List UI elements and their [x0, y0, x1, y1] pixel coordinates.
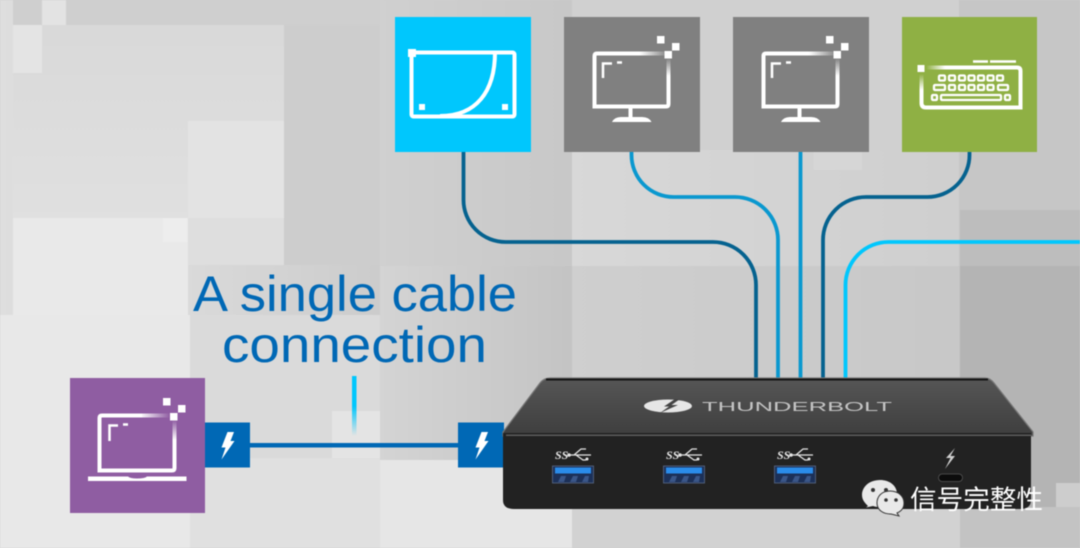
callout leader line [352, 376, 356, 436]
dock logo: THUNDERBOLT [702, 399, 892, 414]
usb port 1: SS [555, 448, 569, 462]
heading: A single cable [193, 266, 517, 322]
cable: keyboard [823, 152, 970, 378]
thunderbolt port [938, 448, 962, 482]
watermark [862, 480, 1043, 516]
tile: tablet [395, 17, 531, 152]
heading [193, 266, 517, 373]
cable: monitor 2 [799, 152, 802, 378]
tile: laptop [70, 378, 205, 513]
tile: monitor 1 [564, 17, 700, 152]
tile: keyboard [902, 17, 1037, 152]
single cable link [205, 422, 504, 468]
dock logo [644, 399, 892, 414]
usb port 3: SS [777, 448, 791, 462]
port: left thunderbolt [205, 422, 250, 468]
heading: connection [222, 317, 487, 373]
usb port 3 [774, 448, 816, 483]
usb port 2: SS [666, 448, 680, 462]
port: right thunderbolt [458, 422, 504, 468]
cables from hub to devices [464, 152, 1080, 378]
icon: wechat bubbles [862, 480, 904, 516]
usb port 2 [664, 448, 704, 483]
cable: monitor 1 [632, 152, 778, 378]
cable: off-screen device [846, 242, 1080, 378]
tile: monitor 2 [733, 17, 869, 152]
thunderbolt dock [503, 378, 1033, 509]
usb port 1 [552, 448, 594, 483]
watermark: 信号完整性 [910, 485, 1043, 515]
cable: tablet [464, 152, 756, 378]
